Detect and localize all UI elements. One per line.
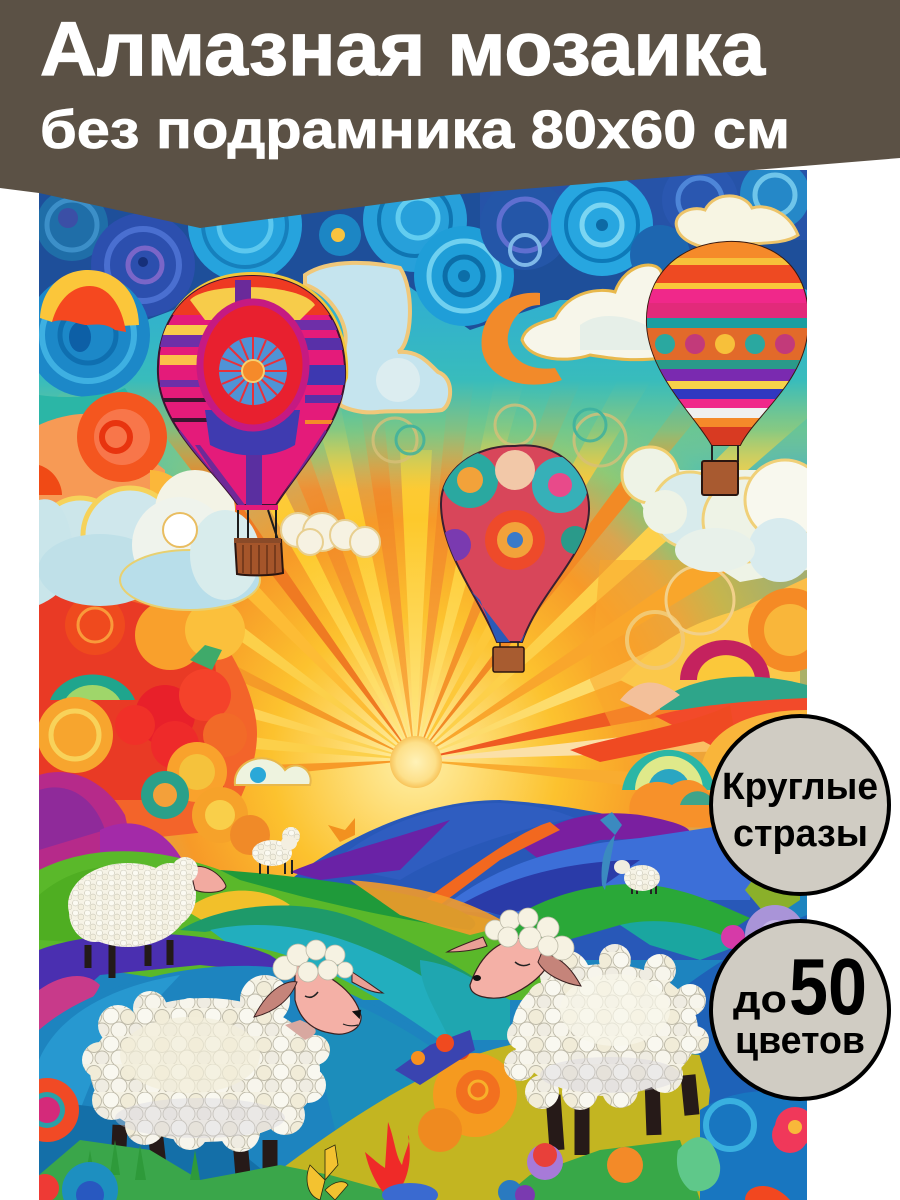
small red plant by sheep ridge: [328, 818, 355, 842]
crescent orange: [482, 293, 562, 385]
sheep: upper left: [68, 857, 226, 978]
orange swirl left: [39, 392, 173, 503]
left rainbow and blue swirl: [39, 270, 150, 396]
hills: green bands: [39, 851, 750, 1040]
cloud: small center: [281, 513, 380, 557]
foreground grass: [39, 1140, 700, 1200]
badge: round rhinestones: стразы: [733, 813, 868, 855]
flower: left red: [15, 1078, 118, 1200]
orange spiral sun on hill: [395, 1030, 517, 1152]
balloon: left: [150, 270, 355, 575]
badge: up to 50 colours: до: [733, 979, 787, 1021]
sun: [390, 736, 442, 788]
hills: far blue and purple: [290, 800, 800, 960]
balloon: center: [373, 405, 626, 672]
base colour: [39, 896, 807, 1169]
sheep: far small right: [614, 860, 660, 894]
flower: yellow leaf plant: [307, 1145, 348, 1200]
sheep: far small on ridge: [252, 827, 300, 874]
blue plant on far hill: [600, 812, 622, 890]
badge: up to 50 colours: [711, 921, 889, 1099]
cloud: left large: [38, 470, 260, 610]
badge: up to 50 colours: 50: [789, 942, 867, 1031]
header banner: [0, 0, 900, 228]
cloud: top left large pale blue: [305, 263, 450, 412]
sheep: big right: [447, 908, 709, 1155]
cloud: right large: [622, 447, 825, 582]
cloud: top right: [676, 196, 798, 248]
flower: blue at bottom center: [382, 1137, 790, 1200]
badge: round rhinestones: [711, 716, 889, 894]
magenta hill left: [39, 771, 270, 870]
right cloud-side orange area: [570, 560, 807, 780]
subtitle: без подрамника 80х60 см: [40, 100, 790, 160]
title: Алмазная мозаика: [40, 7, 766, 92]
sheep: big left: [82, 940, 383, 1200]
sky background: [158, 409, 807, 877]
teal patch below swirl: [39, 388, 128, 425]
sun rays: [58, 394, 807, 794]
cloud: upper right: [522, 265, 662, 360]
balloon: right: [640, 240, 810, 495]
top band: dark blue swirl sky: [39, 170, 807, 340]
hills: purple and blue foreground left: [39, 934, 428, 1180]
hill: yellow foreground: [285, 1045, 710, 1200]
right blue foreground: [688, 905, 807, 1200]
teal upper sky over the rays: [39, 312, 807, 482]
right small rainbow: [622, 750, 716, 828]
flower: red leaf plant: [365, 1122, 410, 1200]
badge: round rhinestones: Круглые: [722, 766, 878, 808]
swirls top left: [36, 160, 810, 326]
painting: balloons and sheep: [39, 170, 807, 1200]
red orange blobs left: [39, 595, 312, 836]
badge: up to 50 colours: цветов: [735, 1020, 865, 1062]
